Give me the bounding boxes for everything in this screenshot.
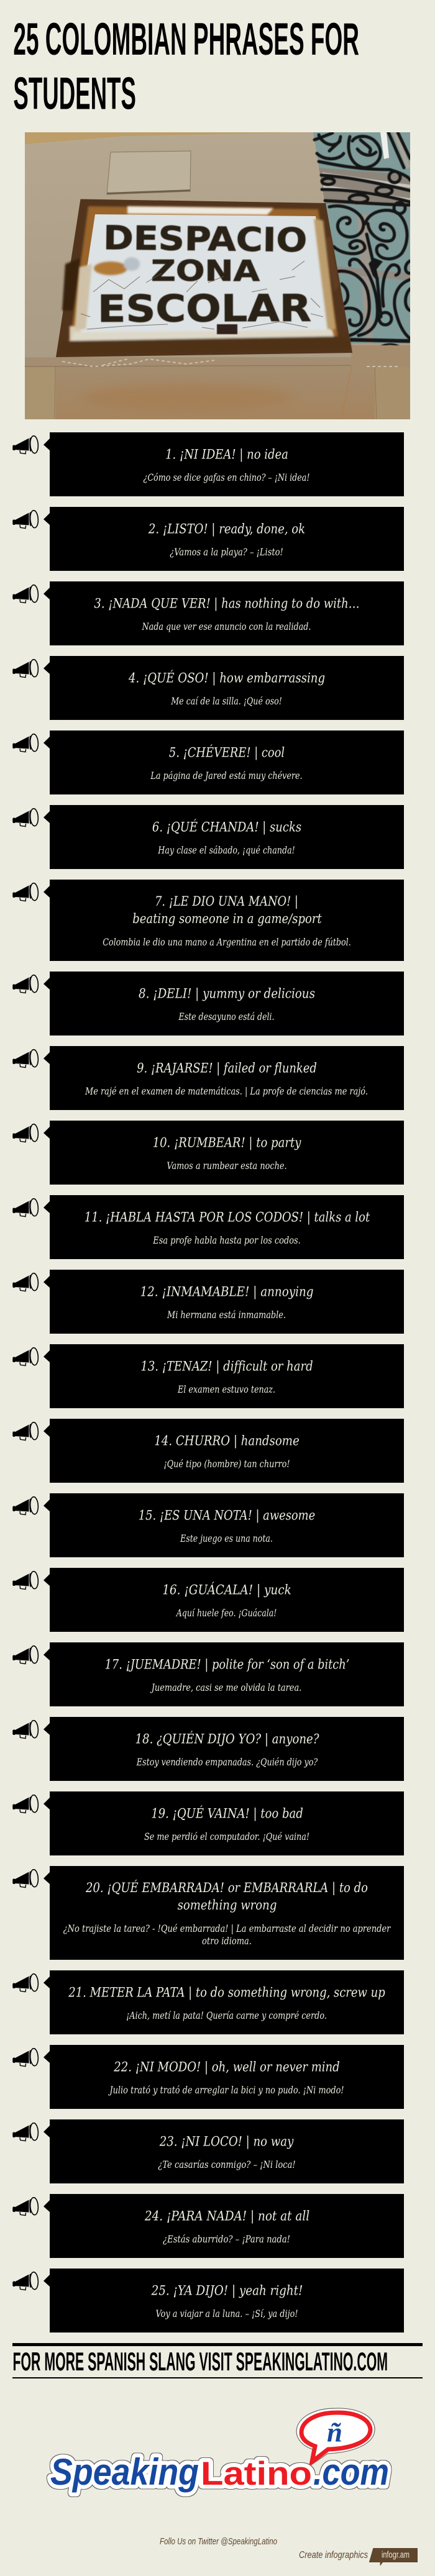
phrase 17 [12,1642,404,1706]
phrase 8: 8. ¡DELI! | yummy or delicious [139,986,315,1001]
icon: megaphone 5 [12,734,50,752]
infogr.am credit: infogr.am [382,2549,410,2560]
phrase 20: otro idioma. [202,1935,252,1947]
phrase 15 [12,1493,404,1557]
phrase 9 [12,1046,404,1110]
phrase 21 [12,1970,404,2034]
phrase 17: 17. ¡JUEMADRE! | polite for ‘son of a bitch’ [105,1657,349,1672]
phrase 14 [12,1419,404,1483]
phrase 25: Voy a viajar a la luna. – ¡Sí, ya dijo! [155,2308,298,2319]
phrase 16: Aquí huele feo. ¡Guácala! [175,1607,277,1619]
phrase 8 [12,972,404,1035]
icon: megaphone 16 [12,1571,50,1590]
icon: megaphone 21 [12,1973,50,1992]
phrase 24 [12,2194,404,2258]
icon: megaphone 10 [12,1124,50,1142]
phrase 19: Se me perdió el computador. ¡Qué vaina! [144,1831,309,1842]
phrase 10 [12,1121,404,1185]
phrase 18 [12,1717,404,1781]
phrase 2: 2. ¡LISTO! | ready, done, ok [148,521,305,537]
title [13,14,359,119]
phrase 5 [12,730,404,794]
icon: megaphone 11 [12,1198,50,1217]
phrase 25: 25. ¡YA DIJO! | yeah right! [151,2283,303,2298]
plaque above the sign [107,151,191,194]
icon: megaphone 13 [12,1347,50,1366]
phrase 4: Me caí de la silla. ¡Qué oso! [170,695,282,707]
phrase 15: 15. ¡ES UNA NOTA! | awesome [139,1508,315,1523]
phrase 10: Vamos a rumbear esta noche. [167,1160,287,1172]
phrase 12: Mi hermana está inmamable. [167,1309,286,1321]
phrase 16 [12,1568,404,1632]
phrase 18: Estoy vendiendo empanadas. ¿Quién dijo yo? [136,1756,318,1768]
phrase 22 [12,2045,404,2109]
phrase 23: 23. ¡NI LOCO! | no way [159,2134,294,2149]
phrase 1 [12,432,404,496]
phrase 4 [12,656,404,720]
metal sign [56,199,352,357]
phrase 9: 9. ¡RAJARSE! | failed or flunked [137,1060,317,1076]
icon: megaphone 1 [12,435,50,454]
logo: SpeakingLatino.com [50,2408,389,2493]
title: STUDENTS [13,68,136,119]
icon: megaphone 23 [12,2123,50,2141]
phrase 3 [12,581,404,645]
phrase 24: 24. ¡PARA NADA! | not at all [144,2208,309,2224]
phrase 17: Juemadre, casi se me olvida la tarea. [150,1682,301,1693]
icon: megaphone 17 [12,1645,50,1664]
phrase 7: Colombia le dio una mano a Argentina en el partido de fútbol. [103,936,351,948]
phrase 22: Julio trató y trató de arreglar la bici y no pudo. ¡Ni modo! [108,2084,344,2096]
phrase 23: ¿Te casarías conmigo? – ¡Ni loca! [158,2159,296,2170]
phrase 7: 7. ¡LE DIO UNA MANO! | [155,894,298,909]
phrase 7 [12,880,404,961]
phrase 20: 20. ¡QUÉ EMBARRADA! or EMBARRARLA | to do [85,1880,368,1896]
speech bubble with ñ [296,2408,375,2466]
icon: megaphone 20 [12,1869,50,1888]
phrase 9: Me rajé en el examen de matemáticas. | La profe de ciencias me rajó. [85,1085,368,1097]
phrase 13: 13. ¡TENAZ! | difficult or hard [140,1359,313,1374]
phrase 1: ¿Cómo se dice gafas en chino? – ¡Ni idea! [144,471,309,483]
phrase 14: 14. CHURRO | handsome [154,1433,300,1449]
icon: megaphone 4 [12,659,50,678]
phrase 13: El examen estuvo tenaz. [177,1383,275,1395]
phrase 10: 10. ¡RUMBEAR! | to party [153,1135,301,1150]
phrase 14: ¡Qué tipo (hombre) tan churro! [163,1458,290,1470]
icon: megaphone 19 [12,1795,50,1813]
phrase 22: 22. ¡NI MODO! | oh, well or never mind [113,2059,340,2075]
phrase 3: Nada que ver ese anuncio con la realidad. [142,621,311,632]
phrase 16: 16. ¡GUÁCALA! | yuck [162,1582,291,1598]
phrase 8: Este desayuno está deli. [178,1011,275,1022]
phrase 2 [12,507,404,571]
window with wrought iron grille [313,132,410,367]
phrase 20: something wrong [178,1898,277,1913]
icon: megaphone 7 [12,883,50,901]
phrase 6: Hay clase el sábado, ¡qué chanda! [157,844,295,856]
wordmark [50,2451,389,2493]
icon: megaphone 24 [12,2197,50,2216]
phrase 24: ¿Estás aburrido? – ¡Para nada! [163,2233,290,2245]
phrase 5: La página de Jared está muy chévere. [150,770,303,781]
phrase 25 [12,2269,404,2333]
phrase 18: 18. ¿QUIÉN DIJO YO? | anyone? [135,1731,319,1747]
phrase 6: 6. ¡QUÉ CHANDA! | sucks [152,819,301,835]
metal sign: ESCOLAR [98,287,311,331]
wordmark: Speaking [50,2451,199,2493]
icon: megaphone 15 [12,1496,50,1515]
icon: megaphone 18 [12,1720,50,1739]
phrase 13 [12,1344,404,1408]
metal sign: ZONA [151,254,260,288]
metal sign: DESPACIO [103,219,308,260]
speech bubble with ñ: ñ [327,2418,342,2447]
phrase 19: 19. ¡QUÉ VAINA! | too bad [151,1806,303,1821]
phrase 5: 5. ¡CHÉVERE! | cool [169,745,285,760]
phrase 19 [12,1791,404,1855]
infogr.am credit: Create infographics [299,2550,368,2560]
icon: megaphone 6 [12,808,50,827]
wordmark: Latino [201,2455,312,2492]
wordmark: .com [313,2451,389,2493]
phrase 3: 3. ¡NADA QUE VER! | has nothing to do with… [94,596,360,611]
phrase 2: ¿Vamos a la playa? – ¡Listo! [170,546,283,558]
phrase 11: 11. ¡HABLA HASTA POR LOS CODOS! | talks a lot [85,1209,370,1225]
phrase 12: 12. ¡INMAMABLE! | annoying [140,1284,313,1299]
phrase 11 [12,1195,404,1259]
phrase 11: Esa profe habla hasta por los codos. [152,1234,301,1246]
icon: megaphone 22 [12,2048,50,2067]
icon: megaphone 3 [12,585,50,603]
icon: megaphone 8 [12,975,50,993]
photo: rusty school zone sign [25,132,410,419]
phrase 21: 21. METER LA PATA | to do something wrong, screw up [68,1985,385,2000]
icon: megaphone 14 [12,1422,50,1440]
phrase 6 [12,805,404,869]
phrase 15: Este juego es una nota. [180,1532,273,1544]
chipped paint on ledge [62,359,398,366]
icon: megaphone 12 [12,1273,50,1291]
phrase 7: beating someone in a game/sport [132,911,322,926]
follow us line: Follo Us on Twitter @SpeakingLatino [160,2537,277,2547]
phrase 4: 4. ¡QUÉ OSO! | how embarrassing [128,670,325,686]
icon: megaphone 2 [12,510,50,529]
icon: megaphone 9 [12,1049,50,1068]
infogr.am credit [299,2548,418,2566]
phrase 12 [12,1270,404,1334]
phrase 23 [12,2119,404,2183]
phrase 1: 1. ¡NI IDEA! | no idea [165,447,288,462]
phrase 21: ¡Aich, metí la pata! Quería carne y compré cerdo. [126,2009,327,2021]
phrase 20 [12,1866,404,1960]
icon: megaphone 25 [12,2272,50,2290]
